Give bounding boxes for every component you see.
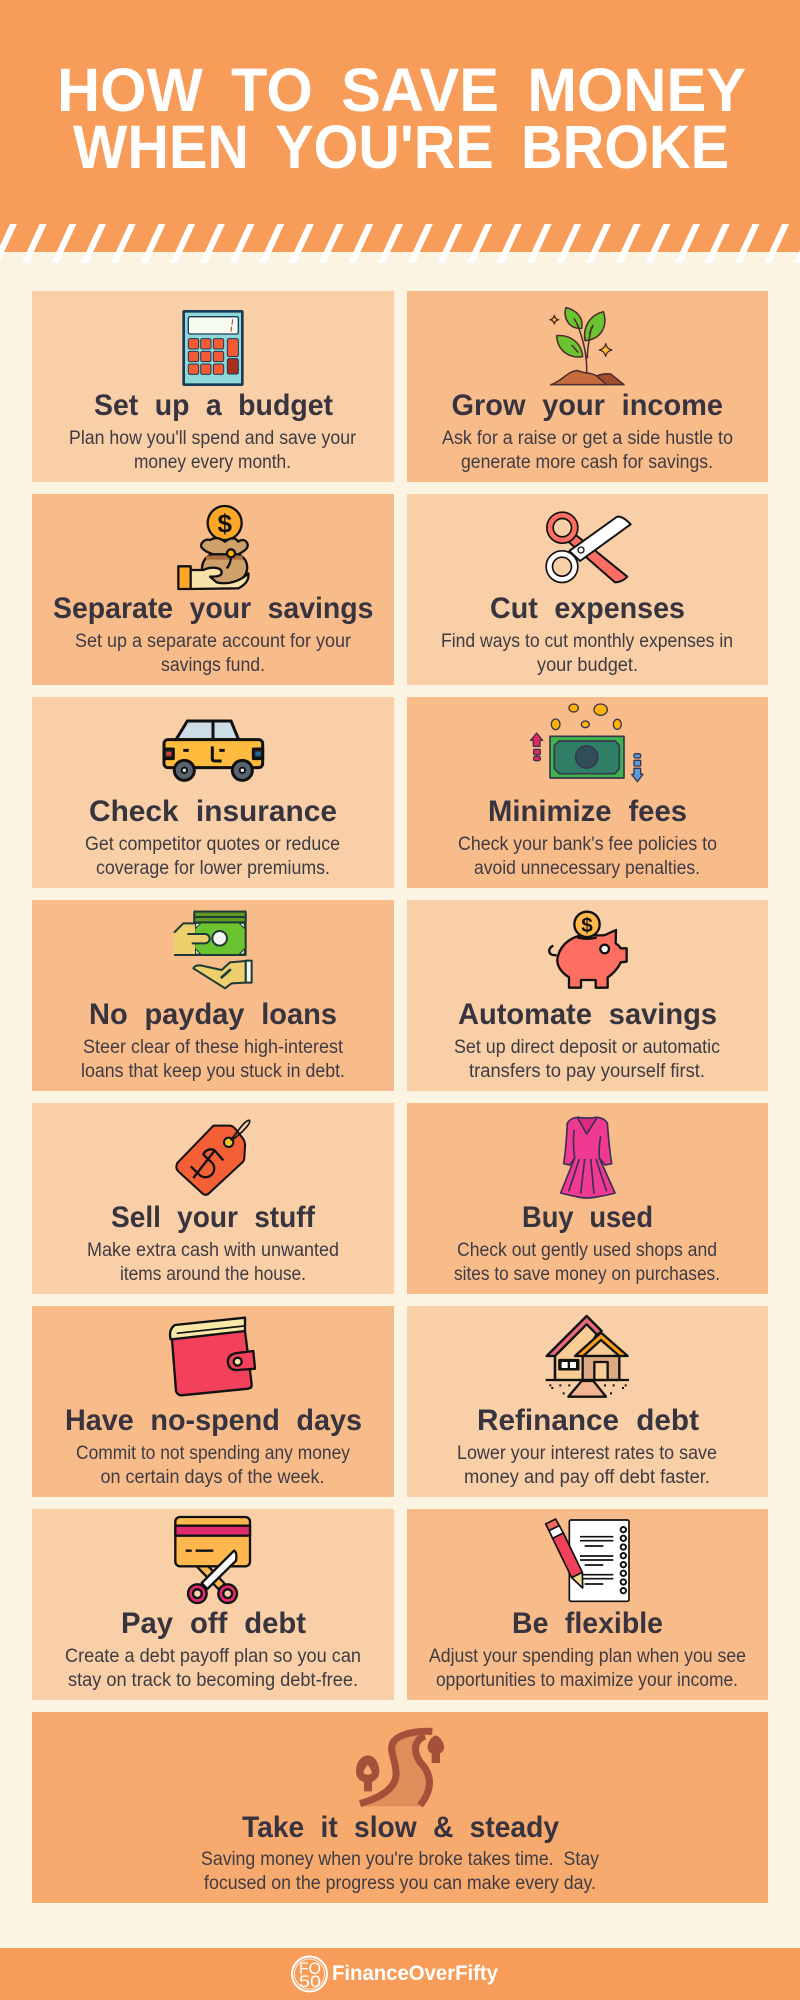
icon: price tag [176, 1120, 250, 1195]
description: opportunities to maximize your income. [436, 1670, 738, 1691]
panel: sell your stuff [32, 1103, 394, 1294]
description [454, 1240, 720, 1285]
description [457, 1443, 717, 1488]
heading: Minimize fees [488, 795, 687, 828]
title [57, 56, 746, 181]
heading: Separate your savings [53, 592, 374, 625]
description [441, 631, 733, 676]
panel: take it slow and steady [32, 1712, 768, 1903]
heading: Take it slow & steady [242, 1811, 559, 1844]
panel: minimize fees [407, 697, 768, 888]
icon: money bag in hand: $ [217, 508, 232, 538]
description: on certain days of the week. [100, 1467, 324, 1488]
description: stay on track to becoming debt-free. [68, 1670, 358, 1691]
icon: house [546, 1316, 629, 1397]
description [87, 1240, 339, 1285]
header banner [0, 0, 800, 252]
logo badge: 50 [299, 1972, 321, 1991]
heading: Grow your income [452, 389, 723, 422]
icon: notebook and pencil [546, 1519, 629, 1601]
logo badge: FO [299, 1959, 321, 1978]
description: money every month. [134, 452, 291, 473]
heading: Set up a budget [94, 389, 333, 422]
icon: credit card and scissors [175, 1517, 250, 1603]
heading: Be flexible [512, 1607, 663, 1640]
description: savings fund. [161, 655, 265, 676]
description: generate more cash for savings. [461, 452, 713, 473]
description: transfers to pay yourself first. [469, 1061, 705, 1082]
heading: Have no-spend days [65, 1404, 362, 1437]
panel: refinance debt [407, 1306, 768, 1497]
description [65, 1646, 361, 1691]
icon: dress [561, 1117, 615, 1198]
panel: separate your savings [32, 494, 394, 685]
heading: Buy used [522, 1201, 653, 1234]
footer bar [0, 1948, 800, 2000]
description: Find ways to cut monthly expenses in [441, 631, 733, 652]
icon: car [164, 721, 263, 780]
description: Adjust your spending plan when you see [429, 1646, 746, 1667]
description: items around the house. [120, 1264, 306, 1285]
description: Steer clear of these high-interest [83, 1037, 344, 1058]
description: Lower your interest rates to save [457, 1443, 717, 1464]
description [454, 1037, 720, 1082]
panel: check insurance [32, 697, 394, 888]
description [201, 1849, 599, 1894]
description [429, 1646, 746, 1691]
heading: No payday loans [89, 998, 337, 1031]
panel: pay off debt [32, 1509, 394, 1700]
heading: Refinance debt [477, 1404, 699, 1437]
description [85, 834, 340, 879]
description: avoid unnecessary penalties. [474, 858, 700, 879]
description: money and pay off debt faster. [464, 1467, 710, 1488]
description: Plan how you'll spend and save your [69, 428, 357, 449]
icon: piggy bank [549, 912, 627, 988]
description: Create a debt payoff plan so you can [65, 1646, 361, 1667]
icon: scissors [549, 515, 631, 582]
heading: Cut expenses [490, 592, 685, 625]
description [442, 428, 733, 473]
description: coverage for lower premiums. [96, 858, 330, 879]
icon: piggy bank: $ [581, 914, 593, 937]
title: WHEN YOU'RE BROKE [73, 113, 729, 181]
description [75, 631, 352, 676]
description: Set up a separate account for your [75, 631, 352, 652]
panel: grow your income [407, 291, 768, 482]
description: your budget. [537, 655, 638, 676]
panel: be flexible [407, 1509, 768, 1700]
description: Saving money when you're broke takes time. Stay [201, 1849, 599, 1870]
heading: Automate savings [458, 998, 717, 1031]
heading: Sell your stuff [111, 1201, 316, 1234]
description [81, 1037, 345, 1082]
description: Make extra cash with unwanted [87, 1240, 339, 1261]
description [76, 1443, 350, 1488]
heading: Pay off debt [121, 1607, 306, 1640]
panel: buy used [407, 1103, 768, 1294]
icon: winding road with trees [356, 1729, 444, 1806]
description: Check your bank's fee policies to [458, 834, 717, 855]
icon: wallet [170, 1318, 255, 1395]
panel: automate savings [407, 900, 768, 1091]
icon: sprout [550, 308, 624, 385]
icon: money bag in hand [178, 506, 248, 589]
title: HOW TO SAVE MONEY [57, 56, 746, 124]
panel: set up a budget [32, 291, 394, 482]
logo badge [292, 1956, 327, 1992]
description: Set up direct deposit or automatic [454, 1037, 720, 1058]
panel: have no-spend days [32, 1306, 394, 1497]
description: focused on the progress you can make every day. [204, 1873, 596, 1894]
description: loans that keep you stuck in debt. [81, 1061, 345, 1082]
icon: calculator [182, 310, 244, 386]
description: sites to save money on purchases. [454, 1264, 720, 1285]
description: Ask for a raise or get a side hustle to [442, 428, 733, 449]
panel: no payday loans [32, 900, 394, 1091]
description: Check out gently used shops and [457, 1240, 717, 1261]
description: Commit to not spending any money [76, 1443, 350, 1464]
description [69, 428, 357, 473]
brand name: FinanceOverFifty [332, 1962, 498, 1985]
icon: banknote with coins and arrows [531, 704, 643, 782]
description [458, 834, 717, 879]
heading: Check insurance [89, 795, 337, 828]
icon: hands exchanging cash [174, 912, 252, 988]
panel: cut expenses [407, 494, 768, 685]
description: Get competitor quotes or reduce [85, 834, 340, 855]
